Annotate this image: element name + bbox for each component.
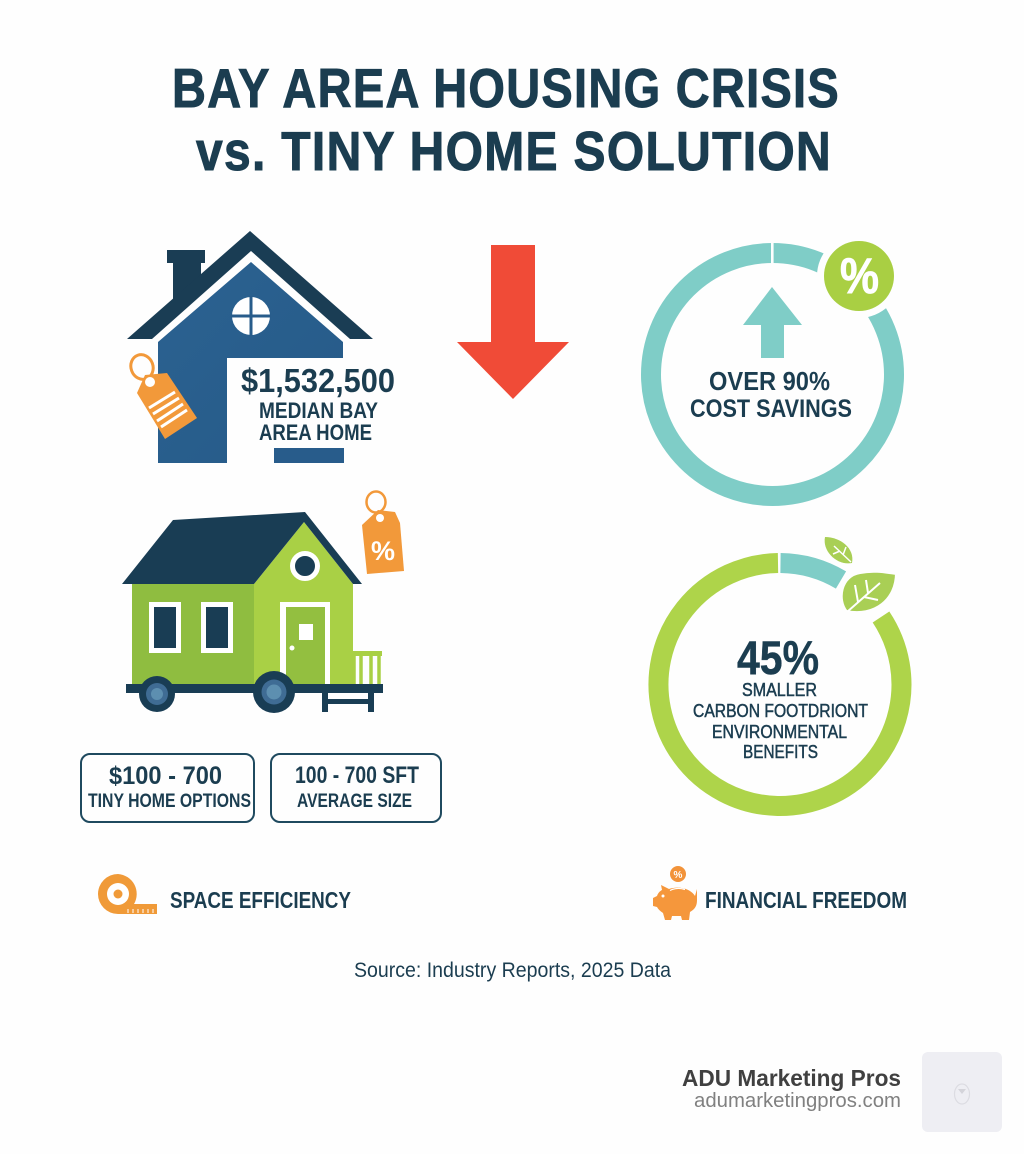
teal ring [651,253,894,496]
porch railing [352,651,382,684]
left wall [132,584,254,684]
logo placeholder [922,1052,1002,1132]
percent figure: 45% [737,631,819,684]
carbon text [693,680,868,762]
space efficiency label: SPACE EFFICIENCY [170,887,351,913]
round window [231,296,271,336]
percent badge [817,234,901,318]
price tag [127,351,197,439]
chimney [167,250,205,306]
source note: Source: Industry Reports, 2025 Data [354,959,671,982]
financial freedom label: FINANCIAL FREEDOM [705,887,907,913]
panel: average size: 100 - 700 SFT [295,762,419,789]
panel: carbon footprint ring [658,537,901,806]
panel: tiny home options: TINY HOME OPTIONS [88,791,251,812]
median label [259,398,378,445]
roof [127,231,373,339]
icon: large house with median price [127,231,395,463]
title [172,57,840,182]
teal segment [780,563,841,580]
rear wheel [139,676,175,712]
gable wall [254,522,353,684]
icon: piggy bank: % [674,870,683,881]
panel: average size: AVERAGE SIZE [297,791,412,812]
brand name: ADU Marketing Pros [682,1065,901,1091]
savings text [690,366,852,423]
door [280,602,330,684]
porch steps [322,693,374,712]
carbon text: ENVIRONMENTAL [712,722,847,742]
median price: $1,532,500 [241,362,395,399]
title: vs. TINY HOME SOLUTION [196,120,832,182]
brand url: adumarketingpros.com [694,1090,901,1112]
carbon text: SMALLER [742,680,817,700]
panel: tiny home options [81,754,254,822]
small leaf [825,537,852,563]
large leaf [841,571,897,613]
front wheel [253,671,295,713]
left window [152,604,178,650]
savings text: COST SAVINGS [690,395,852,423]
round attic window [292,554,318,578]
roof [122,512,362,584]
up arrow [743,287,802,358]
trailer deck [126,684,383,693]
savings text: OVER 90% [709,366,830,396]
percent tag [362,492,404,574]
percent badge: % [840,248,879,304]
panel: average size [271,754,441,822]
right window [204,604,230,650]
panel: cost savings ring [651,234,901,496]
percent tag: % [371,536,395,566]
carbon text: CARBON FOOTDRIONT [693,701,868,721]
panel: tiny home options: $100 - 700 [109,762,222,790]
house body [158,262,343,463]
icon: measuring tape [98,874,157,914]
icon: piggy bank [653,866,697,920]
median label: MEDIAN BAY [259,398,378,423]
house base bar [274,448,344,463]
carbon text: BENEFITS [743,742,818,762]
median label: AREA HOME [259,420,372,445]
green ring [658,563,901,806]
icon: red down arrow [457,245,569,399]
title: BAY AREA HOUSING CRISIS [172,57,840,119]
icon: tiny house on wheels [122,492,404,713]
